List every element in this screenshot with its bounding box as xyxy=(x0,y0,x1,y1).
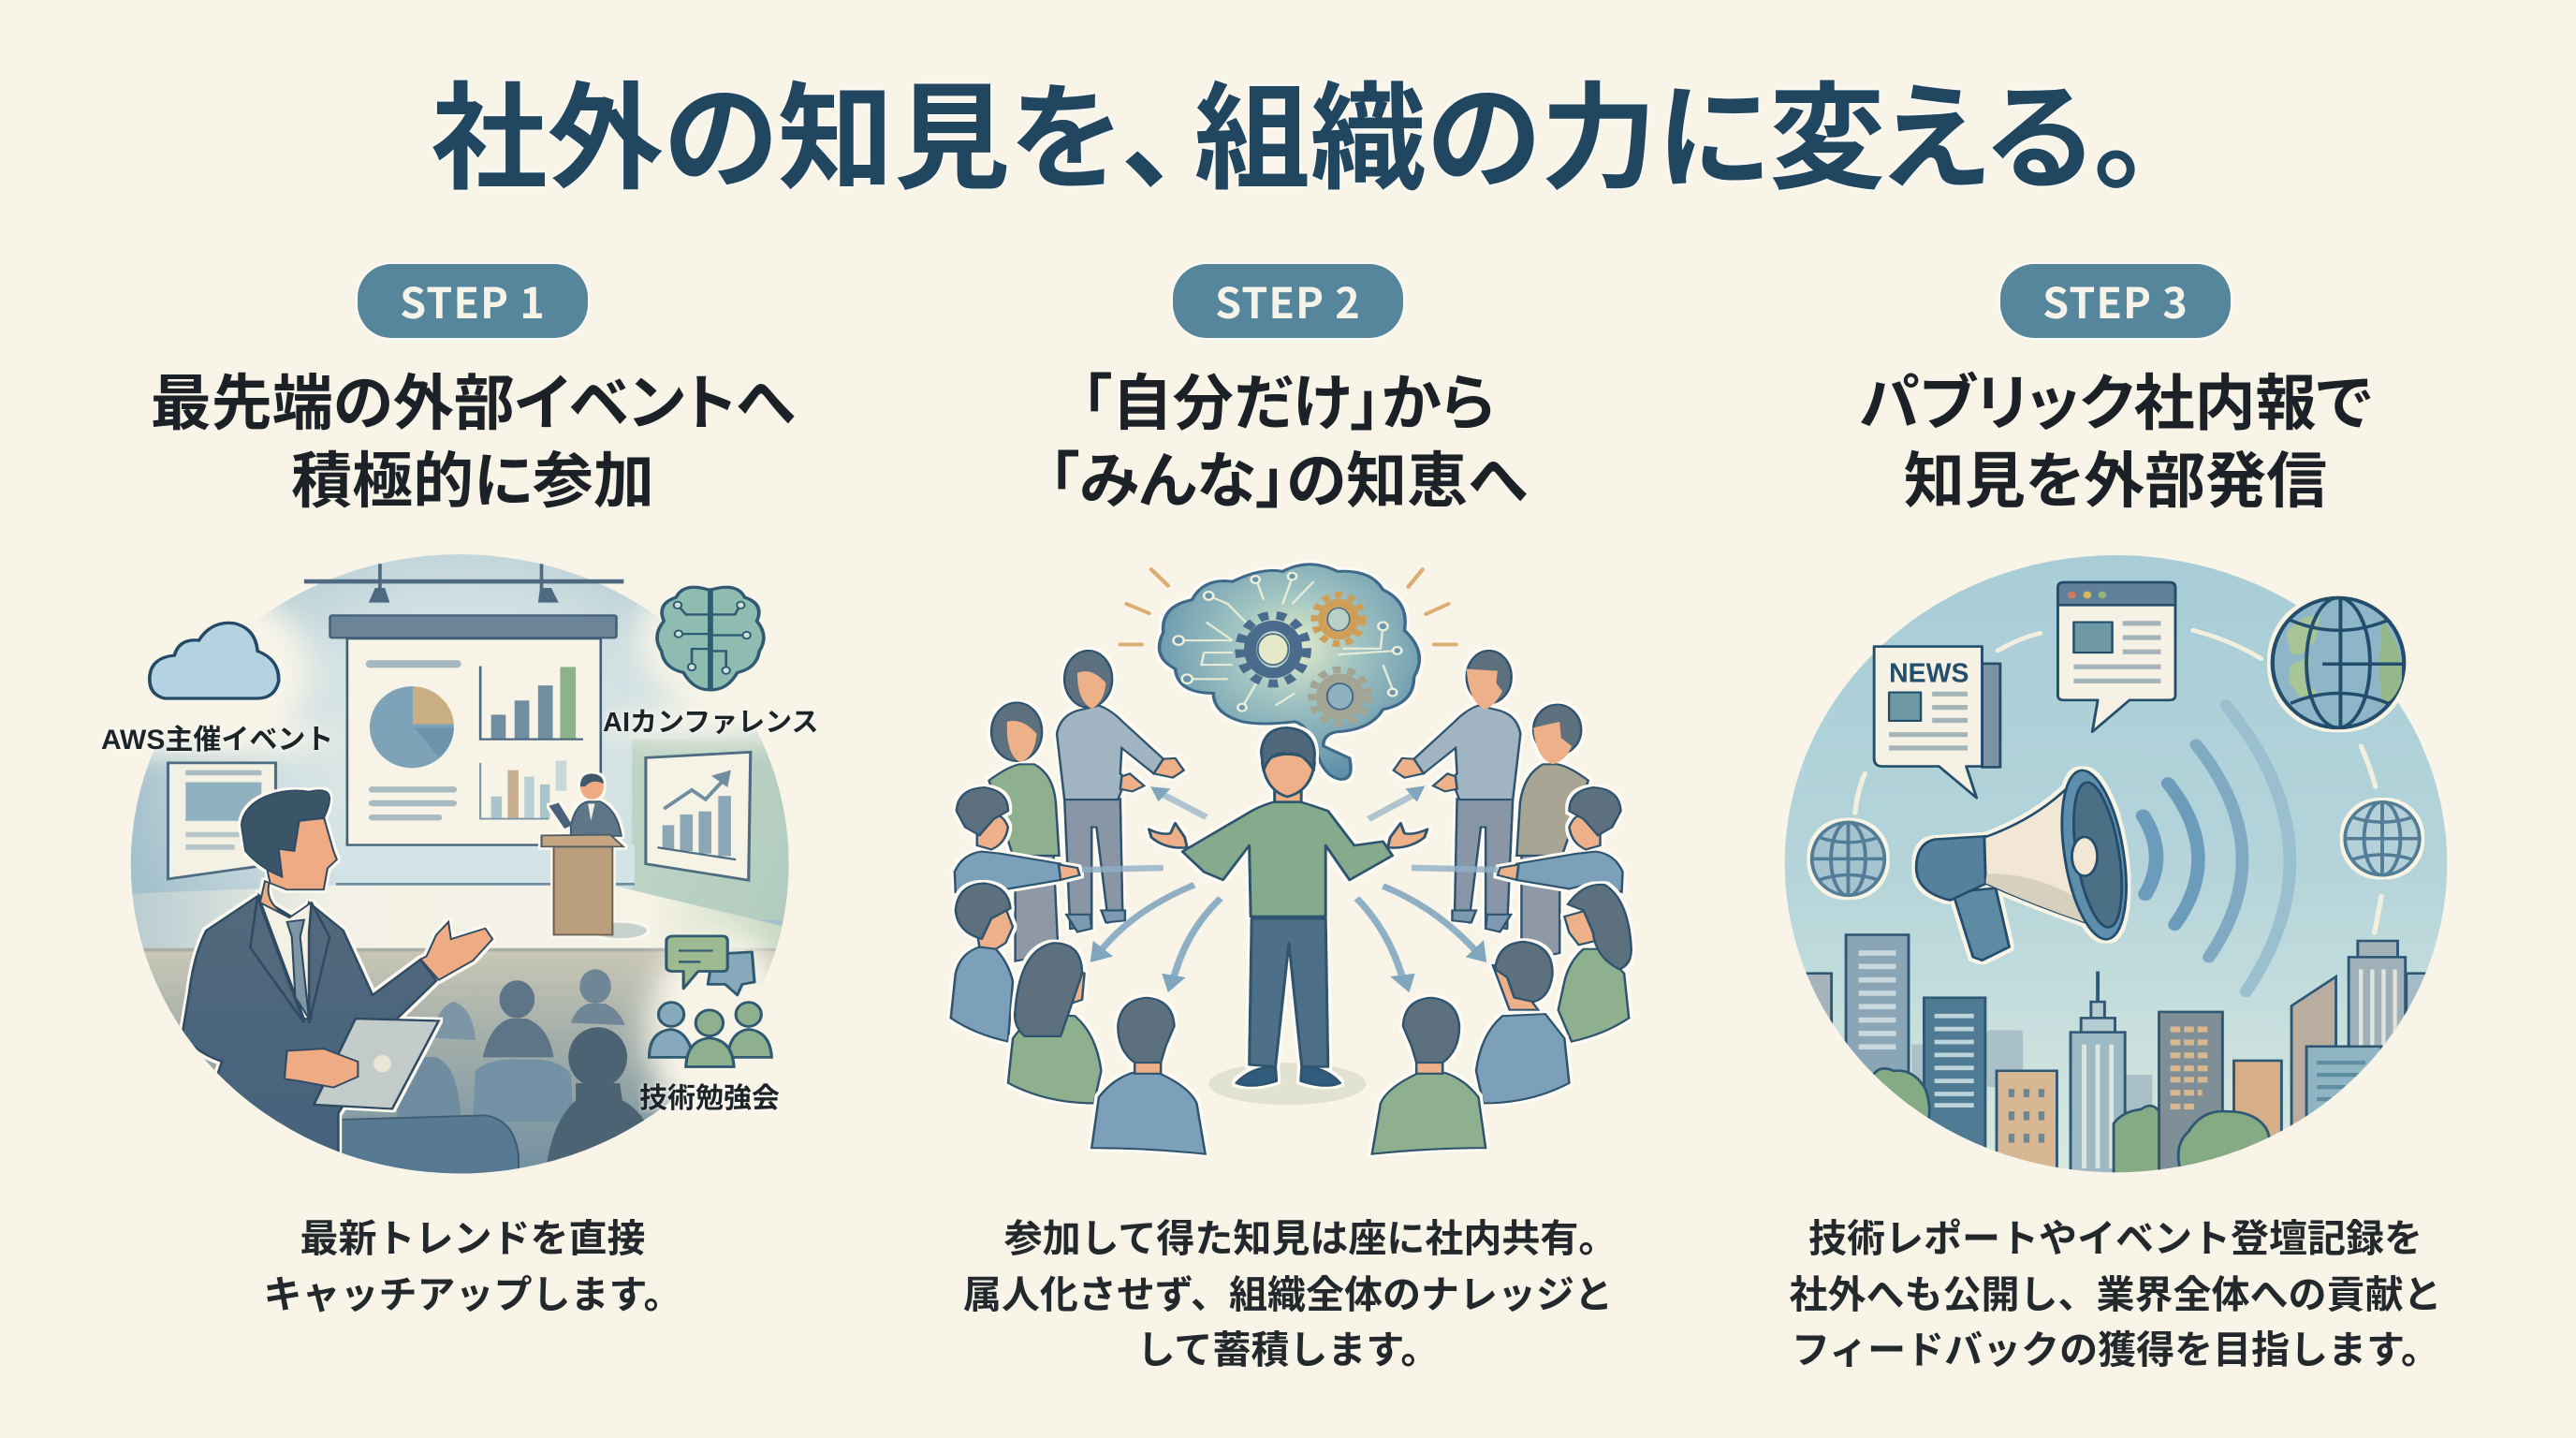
trees xyxy=(1872,1067,2271,1172)
podium and speaker xyxy=(542,773,647,938)
illustration: public broadcast xyxy=(1784,555,2447,1172)
person: tan back right xyxy=(1516,705,1588,961)
person: green back left xyxy=(989,702,1060,961)
connection dashes xyxy=(1855,630,2381,932)
label: tech study session: 技術勉強会 xyxy=(639,1083,780,1114)
person: back left green long hair xyxy=(1008,943,1101,1103)
step 2 badge: STEP 2 xyxy=(1215,270,1361,330)
building blue xyxy=(2305,1045,2383,1117)
tablet xyxy=(314,1019,439,1108)
building tan xyxy=(1996,1069,2058,1168)
city skyline xyxy=(1805,934,2434,1195)
central person xyxy=(1149,727,1427,1105)
person: reaching left xyxy=(955,787,1079,892)
person: grey standing right xyxy=(1394,651,1520,932)
step 2 badge xyxy=(1173,264,1403,338)
icon: cloud xyxy=(150,623,279,698)
step 2 description: して蓄積します。 xyxy=(1137,1318,1439,1374)
projection screen xyxy=(330,615,617,845)
step 3 description: 技術レポートやイベント登壇記録を xyxy=(1808,1207,2422,1263)
bar chart lower xyxy=(480,761,566,819)
panel: step 3 xyxy=(1784,262,2447,1374)
building dark xyxy=(1924,998,1985,1168)
bar chart upper xyxy=(480,667,583,740)
icon: large globe xyxy=(2273,598,2404,727)
icon: megaphone xyxy=(1916,767,2137,961)
pale halos behind icons xyxy=(84,567,823,1130)
person: seated left blue xyxy=(951,883,1013,1042)
step 3 heading: 知見を外部発信 xyxy=(1904,432,2327,520)
building left tall xyxy=(1846,934,1909,1106)
label: AI conference: AIカンファレンス xyxy=(603,708,819,738)
main presenter xyxy=(183,790,492,1156)
icon: web article bubble xyxy=(2057,582,2175,732)
left wall poster xyxy=(168,763,276,879)
step 1 heading xyxy=(151,354,795,520)
sound waves xyxy=(2144,705,2290,991)
step 2 description xyxy=(963,1207,1617,1374)
step 1 heading: 積極的に参加 xyxy=(291,432,654,520)
person: seated right green long hair xyxy=(1559,885,1632,1042)
building right xyxy=(2349,941,2406,1063)
arrows: knowledge flow xyxy=(1082,785,1498,992)
idea rays xyxy=(1120,569,1456,644)
step 2 heading xyxy=(1048,354,1528,520)
sky circle xyxy=(1785,555,2447,1172)
step 1 badge: STEP 1 xyxy=(400,270,546,330)
icon: circuit brain xyxy=(657,587,764,690)
step 1 heading: 最先端の外部イベントへ xyxy=(151,354,795,442)
step 1 description: キャッチアップします。 xyxy=(264,1262,681,1318)
icon: group of people xyxy=(650,1003,771,1066)
illustration: knowledge sharing circle xyxy=(947,561,1635,1157)
ceiling rail xyxy=(304,564,623,603)
step 1 description xyxy=(264,1207,681,1318)
step 2 description: 参加して得た知見は座に社内共有。 xyxy=(1004,1207,1617,1263)
icon: small globe right xyxy=(2345,802,2420,875)
icon: small globe left xyxy=(1812,822,1884,895)
right wall poster xyxy=(646,752,751,880)
step 2 description: 属人化させず、組織全体のナレッジと xyxy=(963,1262,1613,1318)
face xyxy=(260,816,337,917)
step 3 description: フィードバックの獲得を目指します。 xyxy=(1792,1318,2439,1374)
person: reaching right xyxy=(1498,787,1623,892)
step 3 badge: STEP 3 xyxy=(2042,270,2188,330)
building grey windows xyxy=(2159,1012,2222,1174)
shared brain with gears xyxy=(1160,565,1419,779)
pie chart xyxy=(370,686,454,768)
step 2 heading: 「自分だけ」から xyxy=(1081,354,1495,442)
person: front right green xyxy=(1372,998,1486,1154)
illustration: conference presenter xyxy=(131,554,789,1174)
panel: step 2 xyxy=(947,262,1635,1374)
step 1 description: 最新トレンドを直接 xyxy=(300,1207,646,1263)
step 2 heading: 「みんな」の知恵へ xyxy=(1048,432,1528,520)
gear grey xyxy=(1311,669,1368,724)
raised hand xyxy=(420,922,492,980)
person: back right blue xyxy=(1476,942,1569,1103)
step 3 badge xyxy=(2000,264,2231,338)
lower hand xyxy=(285,1049,358,1088)
gear blue xyxy=(1239,615,1307,683)
person: grey standing left xyxy=(1057,651,1184,932)
icon: chat bubbles xyxy=(666,936,754,995)
person: front left blue xyxy=(1091,998,1206,1154)
step 1 badge xyxy=(358,264,588,338)
audience silhouettes xyxy=(337,969,644,1174)
title: 社外の知見を、組織の力に変える。 xyxy=(432,44,2150,213)
step 3 description: 社外へも公開し、業界全体への貢献と xyxy=(1790,1262,2441,1318)
step 3 heading xyxy=(1859,354,2372,520)
icon: news bubble xyxy=(1874,647,2000,798)
gear orange xyxy=(1314,595,1363,644)
circuit traces xyxy=(1180,578,1398,708)
news label: NEWS xyxy=(1889,659,1969,688)
label: AWS event: AWS主催イベント xyxy=(101,725,333,756)
tower xyxy=(2071,972,2125,1195)
step 3 heading: パブリック社内報で xyxy=(1859,354,2372,442)
conference room background xyxy=(131,554,789,1174)
panel: step 1 xyxy=(101,262,819,1318)
step 3 description xyxy=(1790,1207,2441,1374)
